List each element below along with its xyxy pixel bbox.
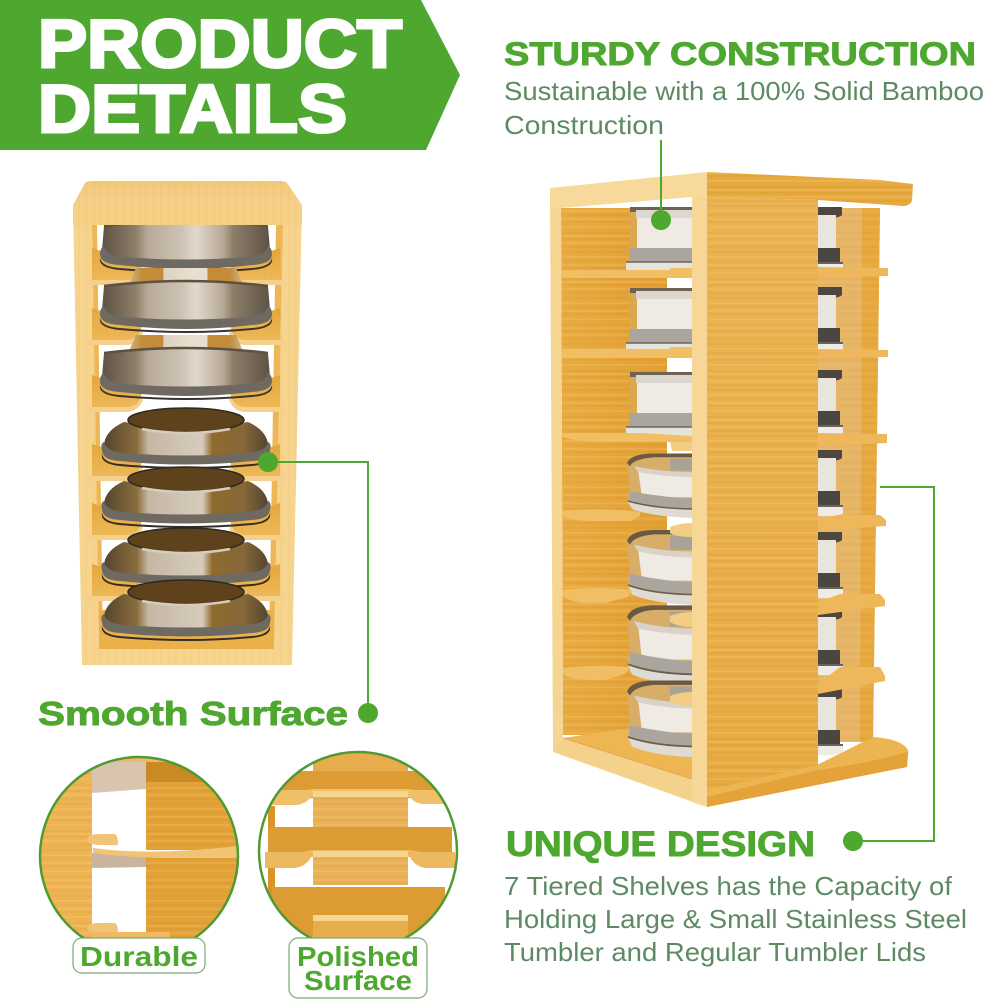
text block: sturdy construction description: Sustainable with a 100% Solid Bamboo bbox=[504, 76, 984, 106]
detail circle: durable bbox=[38, 756, 240, 938]
header banner bbox=[0, 0, 460, 150]
rack frame back bbox=[73, 205, 302, 665]
callout: unique design connector bbox=[853, 487, 934, 841]
callout dot: smooth surface bbox=[358, 703, 378, 723]
top right face bbox=[707, 172, 913, 206]
left side post bbox=[550, 188, 563, 752]
base right bbox=[707, 737, 908, 807]
detail circle: polished surface bbox=[258, 750, 458, 938]
title: PRODUCT bbox=[38, 6, 402, 82]
top left face bbox=[550, 172, 707, 208]
rack floor bbox=[99, 610, 274, 649]
text block: unique design description: 7 Tiered Shelves has the Capacity of bbox=[504, 871, 953, 901]
text block: unique design description: Holding Large & Small Stainless Steel bbox=[504, 904, 967, 934]
label: durable bbox=[73, 938, 205, 973]
product: angled rack bbox=[550, 172, 913, 807]
product: front view rack bbox=[73, 181, 302, 665]
callout: smooth surface connector bbox=[268, 462, 368, 713]
tier 5 bbox=[87, 467, 285, 540]
label: polished surface: Surface bbox=[304, 965, 412, 996]
tier 1 bbox=[87, 208, 285, 285]
heading: sturdy construction: STURDY CONSTRUCTION bbox=[504, 36, 976, 72]
back wall right bbox=[818, 208, 880, 742]
label: polished surface: Polished bbox=[297, 941, 419, 972]
tumblers left bbox=[626, 207, 692, 757]
heading: smooth surface: Smooth Surface bbox=[38, 695, 348, 732]
rack top bbox=[73, 181, 302, 225]
label: polished surface bbox=[289, 938, 427, 998]
tier 4 bbox=[87, 408, 285, 481]
text block: sturdy construction description: Construction bbox=[504, 110, 664, 140]
heading: unique design: UNIQUE DESIGN bbox=[506, 825, 815, 864]
tier 7 bbox=[101, 580, 271, 641]
callout: sturdy connector bbox=[660, 140, 662, 220]
title bbox=[38, 6, 402, 147]
tier 2 bbox=[87, 268, 285, 345]
callout dot: unique design bbox=[843, 831, 863, 851]
front light column bbox=[692, 190, 707, 807]
title: DETAILS bbox=[38, 71, 347, 147]
shelf tabs bbox=[670, 442, 692, 706]
tumblers right bbox=[818, 207, 843, 755]
label: durable: Durable bbox=[80, 941, 198, 972]
tier 3 bbox=[87, 335, 285, 412]
base left bbox=[553, 738, 707, 807]
text block: sturdy construction description bbox=[504, 76, 984, 140]
floor bbox=[563, 728, 692, 779]
callout dot: shelf bbox=[258, 452, 278, 472]
front panel bbox=[707, 197, 818, 807]
text block: unique design description bbox=[504, 871, 967, 967]
tier 6 bbox=[87, 528, 285, 601]
text block: unique design description: Tumbler and Regular Tumbler Lids bbox=[504, 937, 926, 967]
shelves right bbox=[818, 267, 888, 694]
shelves left bbox=[561, 268, 692, 680]
callout dot: sturdy bbox=[651, 210, 671, 230]
back wall left bbox=[561, 208, 667, 735]
